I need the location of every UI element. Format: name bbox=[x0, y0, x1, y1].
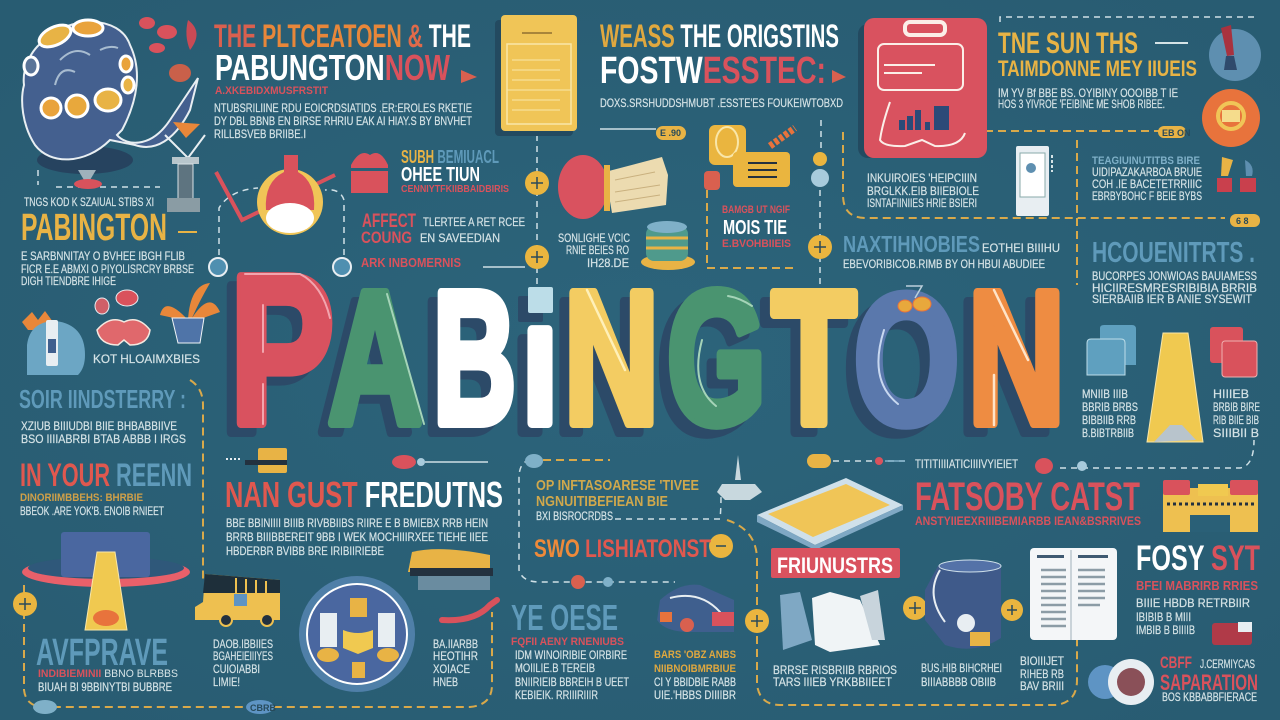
text block: sun heading right: TNE SUN THS bbox=[998, 27, 1138, 60]
text block: pabington left: PABINGTON bbox=[21, 207, 167, 249]
callout pills: yellow tags: 6 8 bbox=[1236, 216, 1249, 226]
heading: naxtihnobies: EOTHEI BIIIHU bbox=[982, 241, 1060, 255]
text block: avfprave: INDIBIEMINII BBNO BLRBBS bbox=[38, 668, 178, 680]
icons: plus nodes bbox=[13, 152, 1023, 633]
icon: small red machine bbox=[1212, 622, 1252, 645]
icon: small heart connector bbox=[392, 455, 488, 469]
text block: barrel caption: BIIIABBBB OBIIB bbox=[921, 675, 996, 689]
text block: mois tie bbox=[722, 204, 791, 250]
text block: book caption: BAV BRIII bbox=[1020, 679, 1064, 693]
text block: avfprave: AVFPRAVE bbox=[36, 632, 168, 674]
text block: bus caption bbox=[213, 637, 273, 689]
heading: fatsoby catst bbox=[915, 475, 1141, 528]
text block: bus caption: BGAHEIEIIIYES bbox=[213, 649, 273, 663]
icon: red and blue train bbox=[657, 585, 734, 632]
heading: hcouenitrts: SIERBAIIB IER B ANIE SYSEWIT bbox=[1092, 292, 1253, 306]
callout pills: bottom blue tags: CBRB bbox=[250, 703, 276, 713]
text block: subh bemiuacl bbox=[401, 147, 509, 195]
text block: op inftasoarest: NGNUITIBEFIEAN BIE bbox=[536, 493, 668, 510]
text block: separation: J.CERMIYCAS bbox=[1200, 657, 1255, 671]
row: small left icons bbox=[22, 283, 220, 375]
icon: pillar tower bbox=[165, 135, 205, 212]
icon: small card top bbox=[226, 448, 287, 473]
text block: mois tie: MOIS TIE bbox=[723, 217, 787, 239]
heading: weass the origstins: WEASS THE ORIGSTINS bbox=[600, 18, 839, 54]
text block: sun heading right: HOS 3 YIVROE 'FEIBINE ME SHOB RIBEE. bbox=[998, 97, 1165, 111]
text block: bus caption: LIMIE! bbox=[213, 675, 240, 689]
text block: yellow caption: CI Y BBIDBIE RABB bbox=[654, 675, 736, 689]
icon: phone bbox=[1016, 146, 1052, 216]
text block: affect coung: COUNG bbox=[361, 228, 412, 247]
text block: right side captions: BIBBIIB RRB bbox=[1082, 413, 1136, 427]
text block: ye oese: BNIIRIEIB BBREIH B UEET bbox=[515, 675, 630, 689]
main title: PABINGTON: N bbox=[968, 253, 1065, 464]
main title: PABINGTON: B bbox=[433, 253, 516, 464]
icon: organ fragments bbox=[139, 17, 200, 138]
heading: fatsoby catst: FATSOBY CATST bbox=[915, 475, 1140, 519]
icon: small connector capsule bbox=[571, 575, 613, 589]
text block: inkuiroies bbox=[867, 171, 979, 210]
text block: op inftasoarest bbox=[536, 477, 699, 523]
icon: red clipboard bbox=[858, 18, 987, 158]
illustration: bottle in yellow circle bbox=[216, 155, 335, 235]
row: connector icons middle bbox=[525, 454, 1087, 474]
text block: right side captions: BRBIB BIRE bbox=[1213, 400, 1260, 414]
text block: subh bemiuacl: OHEE TIUN bbox=[401, 164, 480, 186]
text block: pabington left: DIGH TIENDBRE IHIGE bbox=[21, 274, 116, 288]
text block: inkuiroies: INKUIROIES 'HEIPCIIIN bbox=[867, 171, 977, 185]
text block: book caption: BIOIIIJET bbox=[1020, 654, 1065, 668]
text block: soir industry: XZIUB BIIIUDBI BIIE BHBABBIIVE bbox=[21, 419, 177, 433]
text block: sonlighe bbox=[558, 231, 630, 270]
icon: paper maps bbox=[780, 590, 885, 652]
heading: hcouenitrts bbox=[1092, 237, 1257, 306]
icon: blue circle with microphone bbox=[1209, 25, 1261, 81]
text block: sausage caption: HEOTIHR bbox=[433, 649, 478, 663]
text block: bus caption: DAOB.IBBIIES bbox=[213, 637, 273, 651]
icon: red chest bbox=[351, 153, 388, 193]
text block: fosy syt: IBIBIB B MIII bbox=[1136, 610, 1191, 624]
text block: bus caption: CUIOIABBI bbox=[213, 662, 260, 676]
text block: ye oese bbox=[511, 597, 630, 702]
heading: nan gust freduns: BBE BBINIIII BIIIB RIVBBIIBS RIIRE E B BMIEBX RRB HEIN bbox=[226, 516, 488, 530]
text block: right side captions: RIB BIIE BIB bbox=[1213, 413, 1259, 427]
text block: ye oese: FQFII AENY RNENIUBS bbox=[511, 636, 624, 648]
text block: yellow caption bbox=[654, 649, 736, 702]
text block: ye oese: KEBIEIK. RRIIIRIIIR bbox=[515, 688, 598, 702]
text block: right column: EBRBYBOHC F BEIE BYBS bbox=[1092, 189, 1202, 203]
text block: ye oese: YE OESE bbox=[511, 597, 618, 638]
icon: red sausage bbox=[442, 600, 497, 620]
row: connector icons middle: TITITIIIIATICIIIIVYIEIET bbox=[915, 457, 1019, 471]
text block: pabington left: FICR E.E ABMXI O PIYOLISRCRY BRBSE bbox=[21, 262, 194, 276]
text block: sun heading right: IM YV Bf BBE BS. OYIBINY OOOIBB T IE bbox=[998, 86, 1178, 100]
text block: affect coung: AFFECT bbox=[362, 211, 416, 232]
text block: affect coung: ARK INBOMERNIS bbox=[361, 255, 461, 270]
text block: sausage caption: BA.IIARBB bbox=[433, 637, 478, 651]
heading: swo lishiatonst: SWO LISHIATONST bbox=[534, 535, 711, 563]
text block: right side captions bbox=[1082, 387, 1260, 440]
highlights on title letters bbox=[245, 274, 1028, 425]
heading: nan gust freduns: NAN GUST FREDUTNS bbox=[225, 474, 503, 515]
text block: fosy syt: IMBIB B BIIIIB bbox=[1136, 623, 1195, 637]
illustration: circular food plate bbox=[299, 576, 415, 692]
text block: in your reenn bbox=[20, 457, 192, 518]
text block: right column bbox=[1092, 155, 1202, 203]
icon: yellow machine bbox=[1163, 480, 1258, 532]
text block: maps caption: TARS IIIEB YRKBBIIEET bbox=[773, 675, 893, 689]
text block: right side captions: SIIIBII B bbox=[1213, 426, 1259, 440]
illustration: blue octopus head bbox=[22, 20, 198, 189]
text block: yellow caption: NIIBNOIBMRBIUE bbox=[654, 663, 736, 675]
icon: small figures bbox=[1217, 157, 1256, 192]
text block: soir industry bbox=[19, 384, 186, 446]
main title: PABINGTON: I bbox=[524, 301, 556, 452]
icon: round washer bbox=[1088, 659, 1154, 705]
icon: yellow coach bbox=[408, 549, 493, 590]
main title: PABINGTON: O bbox=[854, 256, 959, 462]
text block: separation: CBFF bbox=[1160, 653, 1192, 672]
icon: open book bbox=[1030, 548, 1117, 640]
text block: pabington left: E SARBNNITAY O BVHEE IBGH FLIB bbox=[21, 249, 185, 263]
text block: affect coung: EN SAVEEDIAN bbox=[420, 231, 500, 245]
icon: stacked hat bbox=[641, 221, 695, 270]
text block: inkuiroies: BRGLKK.EIB BIIEBIOLE bbox=[867, 184, 979, 198]
row: small left icons: KOT HLOAIMXBIES bbox=[93, 352, 200, 366]
icon: yellow clock and panel bbox=[704, 125, 795, 190]
text block: fosy syt bbox=[1136, 539, 1260, 637]
text block: sausage caption: XOIACE bbox=[433, 662, 470, 676]
heading: the pltceatoen and the pabungton now: DY DBL BBNB EN BIRSE RHRIU EAK AI HIAY.S BY BNVHET bbox=[214, 114, 473, 128]
text block: in your reenn: IN YOUR REENN bbox=[20, 457, 192, 493]
text block: sonlighe: IH28.DE bbox=[587, 256, 629, 270]
text block: affect coung: TLERTEE A RET RCEE bbox=[423, 215, 525, 229]
text block: mois tie: E.BVOHBIIEIS bbox=[722, 238, 791, 250]
text block: affect coung bbox=[361, 211, 525, 270]
text block: barrel caption bbox=[921, 661, 1002, 689]
heading: fatsoby catst: ANSTYIIEEXRIIIBEMIARBB IEAN&BSRRIVES bbox=[915, 514, 1141, 528]
heading: weass the origstins: DOXS.SRSHUDDSHMUBT .ESSTE'ES FOUKEIWTOBXD bbox=[600, 96, 843, 110]
text block: sun heading right bbox=[998, 27, 1197, 111]
heading: the pltceatoen and the pabungton now: RILLBSVEB BRIIBE.I bbox=[214, 127, 306, 141]
text block: pabington left bbox=[21, 195, 197, 288]
text block: sonlighe: SONLIGHE VCIC bbox=[558, 231, 630, 245]
main title: PABINGTON: G bbox=[667, 253, 766, 464]
main title: PABINGTON: T bbox=[772, 253, 856, 464]
text block: fosy syt: FOSY SYT bbox=[1136, 539, 1260, 578]
heading: weass the origstins bbox=[600, 18, 846, 110]
heading: the pltceatoen and the pabungton now bbox=[214, 18, 477, 141]
callout pills: bottom blue tags bbox=[33, 700, 276, 714]
text block: right side captions: HIIIEB bbox=[1213, 387, 1249, 401]
text block: ye oese: MOIILIE.B TEREIB bbox=[515, 661, 595, 675]
callout pills: yellow tags bbox=[656, 126, 1260, 227]
text block: sonlighe: RNIE BEIES RO bbox=[566, 243, 629, 257]
illustration: platform with yellow cone bbox=[22, 532, 190, 630]
callout pill: yellow tag: EB ON bbox=[1162, 128, 1191, 138]
heading: nan gust freduns: HBDERBR BVIBB BRE IRIBIIRIEBE bbox=[226, 544, 384, 558]
main title: PABINGTON bbox=[230, 231, 1065, 468]
icon: orange circle bbox=[1202, 89, 1260, 147]
banner: friunustrs: FRIUNUSTRS bbox=[777, 553, 893, 578]
text block: sun heading right: TAIMDONNE MEY IIUEIS bbox=[998, 56, 1197, 81]
text block: right side captions: BBRIB BRBS bbox=[1082, 400, 1138, 414]
text block: yellow caption: UIE.'HBBS DIIIIBR bbox=[654, 688, 736, 702]
text block: right column: UIDIPAZAKARBOA BRUIE bbox=[1092, 165, 1202, 179]
text block: mois tie: BAMGB UT NGIF bbox=[722, 204, 790, 216]
text block: right column: COH .IE BACETETRRIIIC bbox=[1092, 177, 1202, 191]
icon: small ornament on O bbox=[898, 286, 931, 312]
text block: yellow caption: BARS 'OBZ ANBS bbox=[654, 649, 736, 661]
text block: sausage caption bbox=[433, 637, 478, 689]
text block: soir industry: SOIR IINDSTERRY : bbox=[19, 384, 186, 414]
icons: right side blue and red cases bbox=[1087, 325, 1257, 442]
icon: yellow tablet bbox=[757, 478, 903, 550]
icon: yellow document bbox=[495, 15, 577, 136]
icon: yellow bus bbox=[195, 574, 280, 626]
heading: the pltceatoen and the pabungton now: A.XKEBIDXMUSFRSTIT bbox=[215, 85, 328, 97]
heading: the pltceatoen and the pabungton now: PABUNGTONNOW bbox=[215, 47, 450, 88]
text block: maps caption: BRRSE RISBRIIB RBRIOS bbox=[773, 663, 897, 677]
text block: subh bemiuacl: CENNIYTFKIIBBAIDBIRIS bbox=[401, 184, 509, 195]
heading: naxtihnobies bbox=[843, 231, 1060, 271]
text block: inkuiroies: ISNTAFIINIIES HRIE BSIERI bbox=[867, 196, 977, 210]
text block: right side captions: MNIIB IIIB bbox=[1082, 387, 1128, 401]
text block: in your reenn: DINORIIMBBEHS: BHRBIE bbox=[20, 492, 143, 504]
text block: maps caption bbox=[773, 663, 897, 689]
illustration: red lamp with cream shade bbox=[558, 155, 668, 219]
main title: PABINGTON: P bbox=[230, 231, 334, 468]
text block: avfprave bbox=[36, 632, 178, 694]
heading: hcouenitrts: HICIIRESMRESRIBIBIA BRRIB bbox=[1092, 281, 1257, 295]
heading: the pltceatoen and the pabungton now: NTUBSRILIINE RDU EOICRDSIATIDS .ER:EROLES RKETIE bbox=[214, 101, 472, 115]
text block: pabington left: TNGS KOD K SZAIUAL STIBS XI bbox=[24, 195, 154, 209]
text block: sausage caption: HNEB bbox=[433, 675, 458, 689]
heading: naxtihnobies: NAXTIHNOBIES bbox=[843, 231, 980, 257]
text block: barrel caption: BUS.HIB BIHCRHEI bbox=[921, 661, 1002, 675]
text block: fosy syt: BFEI MABRIRB RRIES bbox=[1136, 578, 1258, 593]
text block: in your reenn: BBEOK .ARE YOK'B. ENOIB RNIEET bbox=[20, 504, 164, 518]
text block: ye oese: IDM WINOIRIBIE OIRBIRE bbox=[515, 648, 627, 662]
text block: avfprave: BIUAH BI 9BBINYTBI BUBBRE bbox=[38, 680, 172, 694]
heading: nan gust freduns: BRRB BIIIBBEREIT 9BB I WEK MOCHIIIRXEE TIEHE IIEE bbox=[226, 530, 488, 544]
text block: op inftasoarest: OP INFTASOARESE 'TIVEE bbox=[536, 477, 699, 494]
main title: PABINGTON: A bbox=[328, 253, 422, 464]
text block: right side captions: B.BIBTRBIIB bbox=[1082, 426, 1134, 440]
icon: blue nodes bbox=[209, 258, 351, 276]
icon: blue barrel bbox=[925, 560, 1001, 649]
text block: fosy syt: BIIIE HBDB RETRBIIR bbox=[1136, 596, 1250, 610]
main title: PABINGTON: N bbox=[564, 253, 659, 464]
heading: naxtihnobies: EBEVORIBICOB.RIMB BY OH HBUI ABUDIEE bbox=[843, 257, 1045, 271]
heading: weass the origstins: FOSTWESSTEC: bbox=[600, 50, 826, 92]
text block: separation bbox=[1160, 653, 1258, 704]
text block: book caption: RIHEB RB bbox=[1020, 667, 1064, 681]
text block: book caption bbox=[1020, 654, 1065, 693]
heading: the pltceatoen and the pabungton now: THE PLTCEATOEN & THE bbox=[214, 18, 471, 54]
heading: nan gust freduns bbox=[225, 474, 503, 558]
text block: soir industry: BSO IIIIABRBI BTAB ABBB I IRGS bbox=[21, 432, 186, 446]
callout pills: yellow tags: E .90 bbox=[660, 128, 681, 138]
text block: op inftasoarest: BXI BISROCRDBS bbox=[536, 509, 613, 523]
text block: subh bemiuacl: SUBH BEMIUACL bbox=[401, 147, 499, 167]
text block: right column: TEAGIUINUTITBS BIRE bbox=[1092, 155, 1200, 167]
icon: tower ship bbox=[717, 455, 762, 500]
